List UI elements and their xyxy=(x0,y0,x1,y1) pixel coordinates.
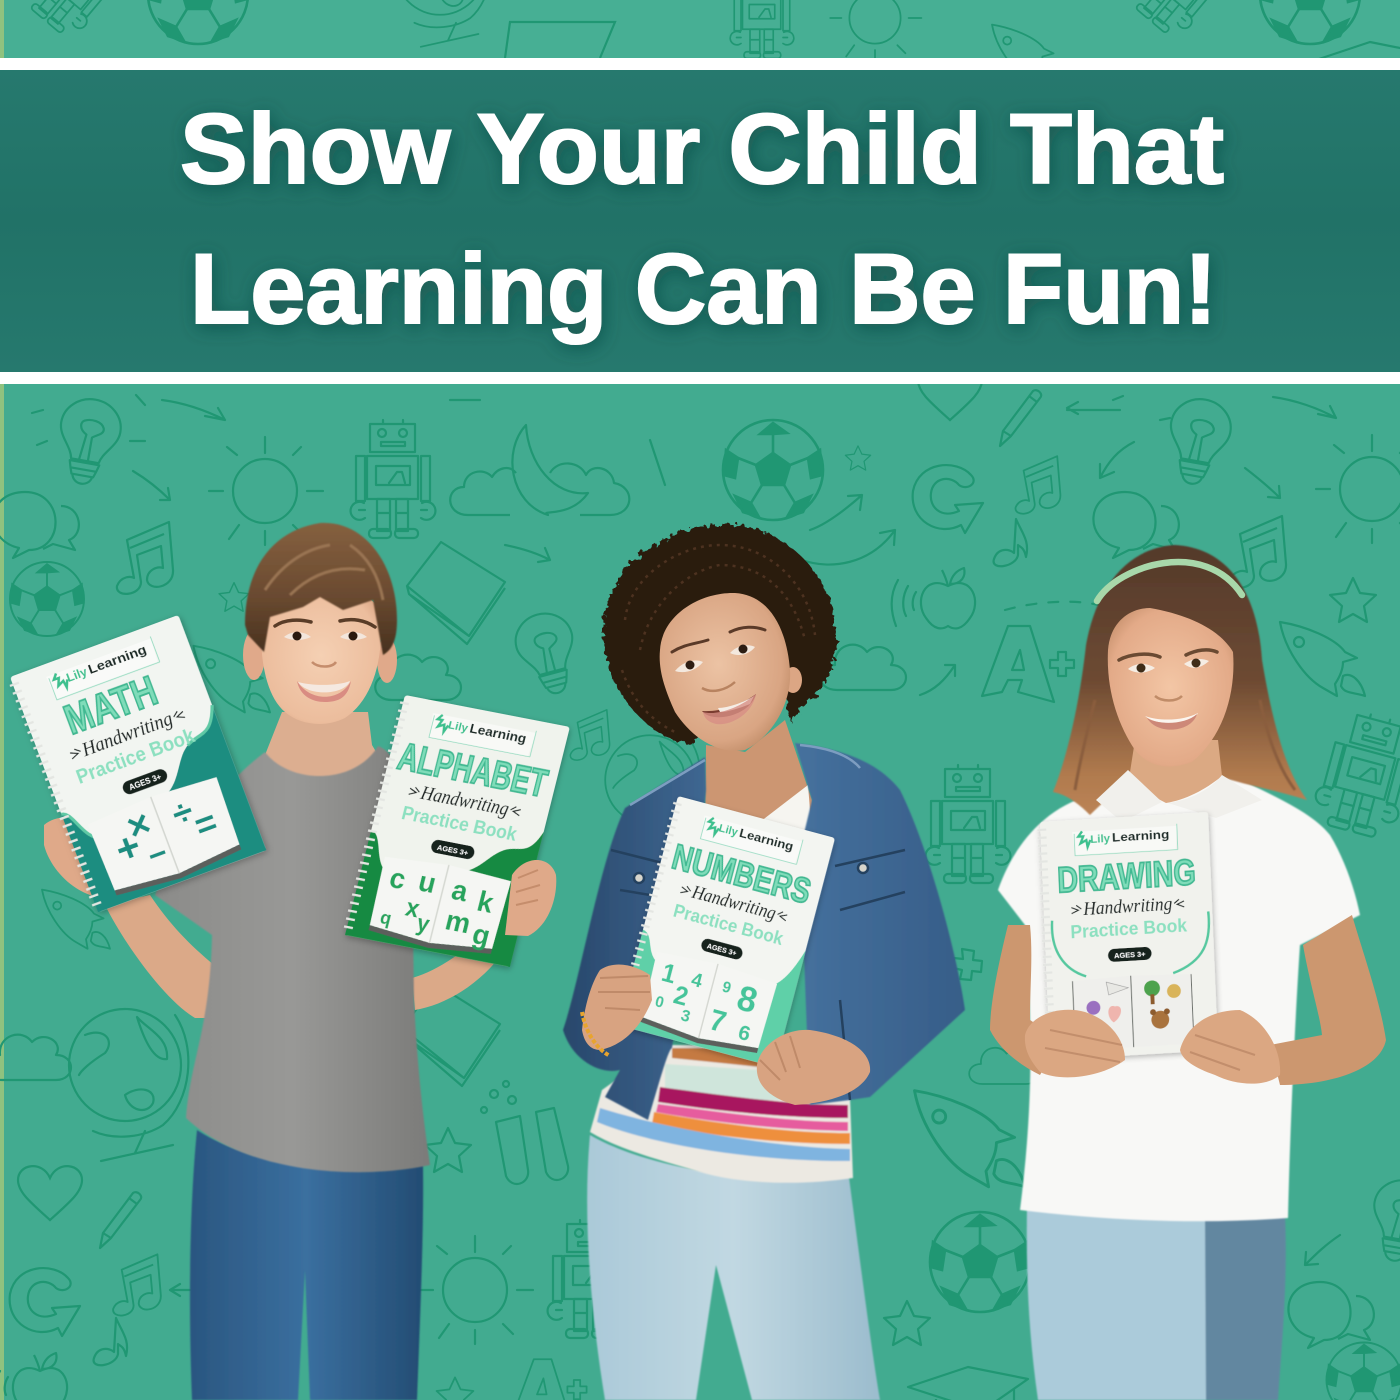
hair strands xyxy=(1075,700,1295,790)
book: Alphabet: y xyxy=(414,910,433,937)
book: Math: = xyxy=(189,802,223,846)
boy left hand xyxy=(44,818,112,905)
book: Alphabet: a xyxy=(448,873,472,908)
boy face xyxy=(261,587,381,724)
book: Numbers: 9 xyxy=(720,979,733,998)
girl smile xyxy=(702,694,756,724)
title xyxy=(180,93,1224,344)
book: Math: MATH xyxy=(58,666,163,743)
white polo shirt xyxy=(998,770,1360,1221)
boy smile xyxy=(297,681,351,702)
boy ears xyxy=(243,630,397,683)
child: girl with headband and Drawing book xyxy=(990,545,1386,1400)
striped top xyxy=(590,1045,853,1183)
book: Alphabet: c xyxy=(386,861,409,896)
book: Alphabet: m xyxy=(442,903,474,940)
book: Numbers: 8 xyxy=(733,978,762,1021)
boy t-shirt xyxy=(155,746,430,1172)
jacket details xyxy=(611,745,905,1100)
book: Math: + xyxy=(110,824,147,873)
boy jeans xyxy=(190,1130,423,1400)
book: Alphabet: u xyxy=(415,864,440,899)
girl ear xyxy=(784,667,802,693)
girl face xyxy=(660,593,790,751)
book: Alphabet xyxy=(342,694,570,967)
book: Numbers: 7 xyxy=(706,1004,730,1040)
title: Show Your Child That xyxy=(180,93,1224,204)
header band xyxy=(0,70,1400,372)
boy neck xyxy=(265,712,378,781)
girl jeans xyxy=(587,1135,880,1400)
girl smile xyxy=(1145,713,1198,730)
hair xyxy=(1053,545,1307,815)
book: Math: ÷ xyxy=(166,791,199,835)
afro curl texture xyxy=(622,545,815,732)
boy near arm xyxy=(105,895,220,1018)
polo collar xyxy=(1096,770,1262,822)
girl eyes, brows and nose xyxy=(1119,650,1217,700)
open book drawings xyxy=(1072,972,1194,1051)
white rules around header band xyxy=(0,58,1400,384)
boy right hand xyxy=(505,860,556,936)
girl left hand xyxy=(1025,1010,1125,1077)
book: Numbers: NUMBERS xyxy=(668,837,815,912)
child: girl with curly hair and Numbers book xyxy=(563,525,965,1400)
girl left hand and bracelet xyxy=(582,965,652,1056)
book: Numbers: 4 xyxy=(689,968,705,993)
boy hair strands xyxy=(265,545,383,600)
book: Numbers: 6 xyxy=(736,1020,753,1046)
book: Drawing: DRAWING xyxy=(1056,852,1197,901)
book: Alphabet: g xyxy=(469,917,494,952)
book: Numbers: 2 xyxy=(671,981,691,1012)
title: Learning Can Be Fun! xyxy=(190,233,1217,344)
book: Alphabet: x xyxy=(403,894,423,924)
book: Numbers: 1 xyxy=(659,958,679,990)
girl right hand xyxy=(1180,1010,1280,1084)
book: Alphabet: k xyxy=(474,884,497,919)
book: Alphabet: q xyxy=(378,907,394,929)
girl right hand xyxy=(757,1030,870,1105)
book: Numbers xyxy=(615,795,835,1067)
girl neck xyxy=(1130,740,1222,803)
book: Numbers: 3 xyxy=(679,1006,692,1026)
boy far arm xyxy=(412,930,505,1010)
girl jeans xyxy=(1027,1205,1286,1400)
girl afro hair xyxy=(603,525,836,745)
headband xyxy=(1097,562,1242,601)
girl eyes, brows and nose xyxy=(672,627,765,691)
book: Math: − xyxy=(142,834,172,874)
boy eyes, brows and nose xyxy=(275,620,375,666)
book: Math: × xyxy=(121,803,157,850)
girl neck and white collar xyxy=(705,720,812,850)
book: Alphabet: ALPHABET xyxy=(394,735,552,806)
child: boy with Math and Alphabet books xyxy=(7,523,570,1400)
girl face xyxy=(1108,608,1233,766)
boy hair xyxy=(245,523,397,655)
book: Math xyxy=(7,615,266,913)
book: Drawing xyxy=(1037,812,1218,1060)
girl arms xyxy=(990,915,1386,1085)
denim jacket xyxy=(563,743,965,1120)
book: Numbers: 0 xyxy=(653,993,666,1012)
